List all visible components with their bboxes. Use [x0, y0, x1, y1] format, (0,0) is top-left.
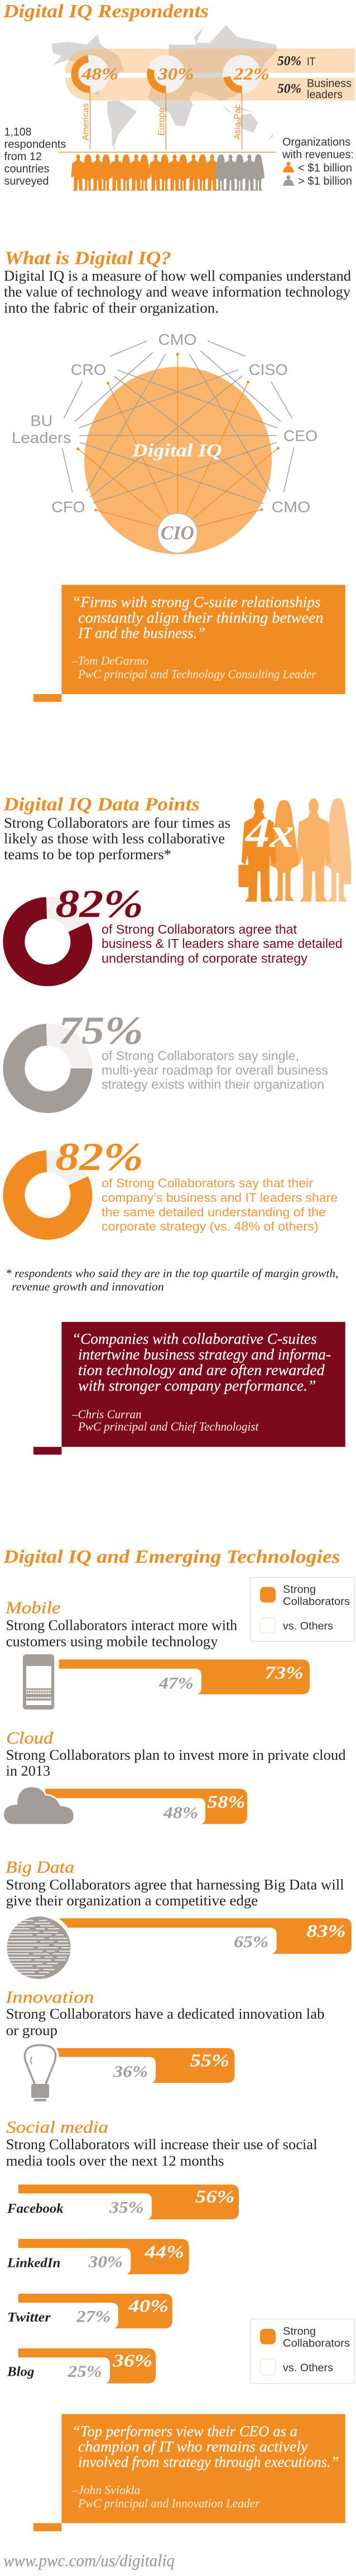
- cloud section text: [6, 1728, 346, 1779]
- quote: John Sviokla: “Top performers view their CEO as a: [72, 2423, 297, 2440]
- quote: Chris Curran: with stronger company performance.”: [78, 1377, 316, 1394]
- quote: Tom DeGarmo: –Tom DeGarmo: [71, 654, 148, 668]
- source URL: www.pwc.com/us/digitaliq: [3, 2550, 175, 2570]
- legend: top: Collaborators: [283, 1596, 350, 1608]
- legend: bottom: Strong: [283, 2325, 316, 2337]
- quote: Tom DeGarmo: PwC principal and Technology Consulting Leader: [78, 667, 316, 681]
- bar: cloud 58% vs 48%: [45, 1789, 247, 1824]
- donut: Asia-Pac 22%: 22%: [233, 64, 270, 84]
- bar: mobile 73% vs 47%: 73%: [264, 1662, 304, 1682]
- legend: bottom: [251, 2319, 354, 2384]
- people row: [71, 155, 264, 191]
- big data section text: [6, 1857, 344, 1909]
- social media section text: Strong Collaborators will increase their use of social: [6, 2136, 317, 2153]
- bar: Twitter 40% vs 27%: Twitter: [7, 2310, 51, 2325]
- 4x people illustration: 4x: [244, 810, 294, 856]
- donut: Asia-Pac 22%: [223, 55, 270, 93]
- stat: 75% roadmap: [14, 1009, 328, 1102]
- quote: Tom DeGarmo: [33, 585, 345, 702]
- innovation section text: Strong Collaborators have a dedicated innovation lab: [6, 2006, 325, 2022]
- legend: bottom: vs. Others: [283, 2362, 333, 2374]
- icon: cloud: [4, 1787, 74, 1824]
- stat: 82% detailed understanding: 82%: [55, 882, 143, 926]
- C-suite network diagram: CRO: [71, 361, 106, 378]
- footnote: * respondents who said they are in the top quartile of margin growth,: [6, 1267, 338, 1280]
- quote: John Sviokla: champion of IT who remains actively: [78, 2438, 307, 2455]
- 4x people illustration: [238, 798, 351, 902]
- stat: 82% vs 48% of others: of Strong Collaborators say that their: [102, 1176, 313, 1190]
- bar: Twitter 40% vs 27%: 40%: [128, 2295, 169, 2315]
- donut: Europe 30%: [147, 55, 194, 93]
- revenue legend: with revenues:: [282, 148, 354, 161]
- innovation section text: or group: [6, 2022, 57, 2039]
- social media section text: media tools over the next 12 months: [6, 2153, 224, 2169]
- quote: John Sviokla: [33, 2414, 345, 2531]
- C-suite network diagram: CIO: [161, 522, 194, 543]
- stat: 82% detailed understanding: understanding of corporate strategy: [102, 951, 307, 966]
- quote: Chris Curran: –Chris Curran: [71, 1407, 142, 1421]
- C-suite network diagram: CMO: [272, 498, 310, 516]
- stat: 82% vs 48% of others: corporate strategy (vs. 48% of others): [102, 1220, 318, 1234]
- donut: Americas 48%: [71, 55, 118, 93]
- C-suite network diagram: BU: [30, 412, 52, 430]
- icon: phone: [23, 1654, 54, 1710]
- job role split: 50%: [277, 82, 301, 97]
- definition text: the value of technology and weave information technology: [4, 283, 350, 300]
- bar: Blog 36% vs 25%: [7, 2348, 156, 2384]
- data points intro: Strong Collaborators are four times as: [4, 815, 230, 831]
- title: Digital IQ Respondents: Digital IQ Respondents: [3, 1, 209, 22]
- region lines and labels: [58, 93, 276, 152]
- stat: 82% vs 48% of others: the same detailed understanding of the: [102, 1205, 326, 1219]
- stat: 82% vs 48% of others: [14, 1135, 338, 1234]
- bar: innovation 55% vs 36%: 36%: [113, 2062, 148, 2081]
- bar: Facebook 56% vs 35%: 35%: [109, 2198, 144, 2217]
- bar: LinkedIn 44% vs 30%: LinkedIn: [7, 2256, 60, 2271]
- C-suite network diagram: CEO: [283, 427, 317, 444]
- definition text: Digital IQ is a measure of how well companies understand: [4, 268, 351, 284]
- C-suite network diagram: CMO: [158, 331, 196, 348]
- bar: LinkedIn 44% vs 30%: 44%: [145, 2241, 184, 2261]
- data points intro: likely as those with less collaborative: [4, 831, 225, 847]
- bar: LinkedIn 44% vs 30%: [7, 2239, 189, 2274]
- data points intro: [4, 815, 230, 863]
- respondents note: 1,108: [4, 126, 31, 138]
- quote: Chris Curran: “Companies with collaborative C-suites: [72, 1331, 317, 1347]
- social media section text: [6, 2117, 317, 2169]
- bar: Twitter 40% vs 27%: [7, 2294, 172, 2328]
- stat: 75% roadmap: strategy exists within their organization: [102, 1077, 324, 1092]
- footnote: [6, 1267, 338, 1293]
- innovation section text: [5, 1987, 325, 2039]
- quote: Tom DeGarmo: “Firms with strong C-suite relationships: [72, 594, 321, 610]
- job role split: [277, 54, 352, 101]
- stat: 82% vs 48% of others: company’s business and IT leaders share: [102, 1191, 338, 1205]
- quote: John Sviokla: PwC principal and Innovation Leader: [78, 2496, 260, 2510]
- bar: Twitter 40% vs 27%: 27%: [76, 2308, 110, 2326]
- job role split: Business: [307, 78, 352, 90]
- respondents note: surveyed: [4, 175, 49, 187]
- definition text: [4, 268, 351, 316]
- quote: Tom DeGarmo: IT and the business.”: [78, 624, 205, 641]
- C-suite network diagram: Digital IQ: [132, 441, 222, 461]
- bar: Facebook 56% vs 35%: 56%: [195, 2186, 234, 2206]
- bar: innovation 55% vs 36%: [56, 2048, 235, 2083]
- cloud section text: Cloud: [6, 1728, 54, 1747]
- stat: 75% roadmap: multi-year roadmap for overall business: [102, 1063, 328, 1077]
- C-suite network diagram: CFO: [51, 498, 85, 516]
- stat: 75% roadmap: 75%: [58, 1009, 143, 1053]
- quote: John Sviokla: involved from strategy through executions.”: [78, 2454, 339, 2471]
- bar: LinkedIn 44% vs 30%: 30%: [88, 2253, 123, 2271]
- quote: Chris Curran: tion technology and are often rewarded: [78, 1362, 325, 1379]
- donut: Europe 30%: 30%: [157, 64, 194, 84]
- heading: Digital IQ Data Points: Digital IQ Data Points: [3, 795, 200, 815]
- region lines and labels: Americas: [81, 103, 91, 141]
- cloud section text: Strong Collaborators plan to invest more in private cloud: [6, 1747, 346, 1763]
- heading: Digital IQ and Emerging Technologies: Digital IQ and Emerging Technologies: [3, 1547, 340, 1567]
- respondents note: [4, 126, 66, 187]
- mobile section text: customers using mobile technology: [6, 1634, 218, 1650]
- bar: innovation 55% vs 36%: 55%: [190, 2050, 229, 2071]
- big data section text: Big Data: [6, 1857, 74, 1877]
- job role split: IT: [307, 56, 315, 68]
- data points intro: teams to be top performers*: [4, 846, 171, 863]
- respondents note: respondents: [4, 138, 66, 151]
- icon: data globe: [7, 1917, 70, 1979]
- bar: cloud 58% vs 48%: 58%: [207, 1792, 245, 1812]
- bar: Facebook 56% vs 35%: Facebook: [7, 2202, 64, 2216]
- bar: Facebook 56% vs 35%: [7, 2184, 239, 2219]
- bar: big data 83% vs 65%: [60, 1918, 352, 1954]
- legend: top: Strong: [283, 1584, 316, 1596]
- legend: top: [251, 1577, 354, 1641]
- mobile section text: [5, 1598, 237, 1650]
- quote: Chris Curran: PwC principal and Chief Technologist: [78, 1419, 259, 1433]
- icon: light bulb: [25, 2045, 56, 2101]
- revenue legend: [282, 136, 354, 187]
- quote: Tom DeGarmo: constantly align their thinking between: [78, 609, 324, 626]
- bar: Blog 36% vs 25%: 25%: [67, 2362, 102, 2381]
- cloud section text: in 2013: [6, 1763, 50, 1779]
- C-suite network diagram: CISO: [249, 361, 288, 378]
- C-suite network diagram: Leaders: [12, 429, 71, 446]
- bar: cloud 58% vs 48%: 48%: [163, 1803, 198, 1822]
- revenue legend: > $1 billion: [298, 175, 352, 187]
- quote: Chris Curran: intertwine business strategy and informa-: [78, 1346, 331, 1362]
- big data section text: give their organization a competitive edge: [6, 1893, 258, 1909]
- bar: Blog 36% vs 25%: Blog: [7, 2365, 34, 2379]
- legend: top: vs. Others: [283, 1621, 333, 1633]
- bar: Blog 36% vs 25%: 36%: [112, 2351, 152, 2371]
- respondents note: from 12: [4, 151, 42, 163]
- legend: bottom: Collaborators: [283, 2338, 350, 2349]
- region lines and labels: Europe: [157, 108, 166, 136]
- revenue legend: < $1 billion: [298, 162, 352, 174]
- social media section text: Social media: [6, 2117, 108, 2137]
- stat: 82% detailed understanding: of Strong Collaborators agree that: [102, 922, 297, 936]
- big data section text: Strong Collaborators agree that harnessing Big Data will: [6, 1877, 344, 1893]
- revenue legend: Organizations: [282, 136, 350, 148]
- heading: What is Digital IQ?: What is Digital IQ?: [4, 248, 171, 269]
- region bands: [65, 49, 355, 100]
- bar: mobile 73% vs 47%: 47%: [158, 1674, 194, 1693]
- definition text: into the fabric of their organization.: [4, 300, 219, 316]
- stat: 75% roadmap: of Strong Collaborators say single,: [102, 1048, 299, 1063]
- C-suite network diagram: [12, 331, 317, 555]
- stat: 82% detailed understanding: business & IT leaders share same detailed: [102, 936, 343, 951]
- quote: John Sviokla: –John Sviokla: [71, 2483, 141, 2497]
- region lines and labels: Asia-Pac: [233, 104, 242, 139]
- job role split: 50%: [277, 54, 301, 69]
- job role split: leaders: [307, 89, 343, 101]
- quote: Chris Curran: [33, 1322, 345, 1455]
- donut: Americas 48%: 48%: [81, 64, 118, 84]
- mobile section text: Strong Collaborators interact more with: [6, 1617, 237, 1634]
- mobile section text: Mobile: [5, 1598, 61, 1617]
- innovation section text: Innovation: [5, 1987, 94, 2006]
- bar: big data 83% vs 65%: 65%: [234, 1933, 268, 1951]
- world map: [51, 25, 277, 150]
- footnote: revenue growth and innovation: [12, 1280, 164, 1293]
- stat: 82% vs 48% of others: 82%: [55, 1135, 143, 1179]
- stat: 82% detailed understanding: [14, 882, 343, 975]
- bar: mobile 73% vs 47%: [59, 1659, 310, 1694]
- bar: big data 83% vs 65%: 83%: [306, 1921, 346, 1941]
- respondents note: countries: [4, 163, 49, 175]
